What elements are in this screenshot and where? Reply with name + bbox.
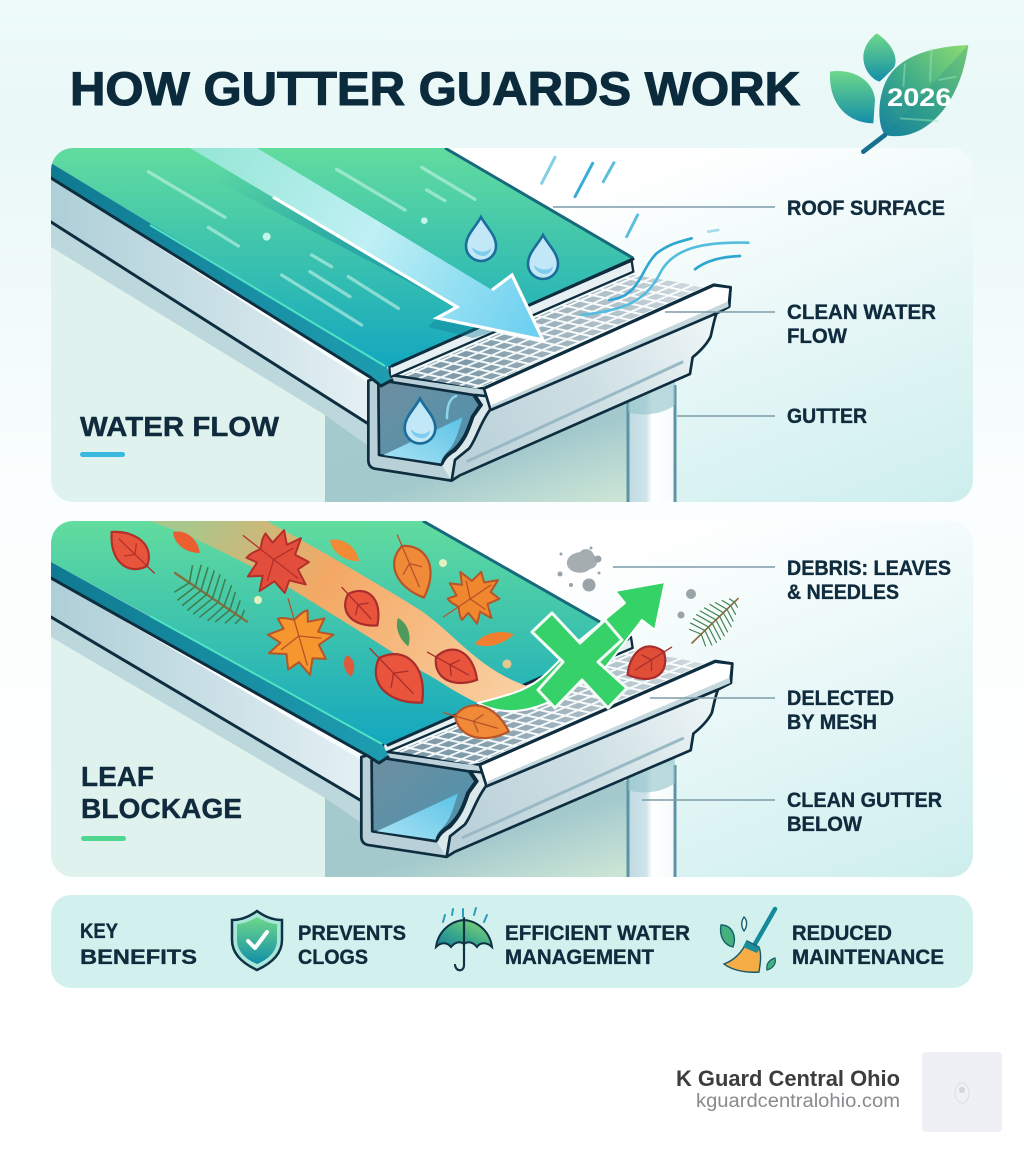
heading: key benefits: KEY (80, 920, 118, 943)
benefit: prevents clogs (298, 922, 406, 969)
wall shadow under gutter (325, 400, 640, 502)
benefit: efficient water management: EFFICIENT WATER (505, 922, 690, 945)
icon: broom and leaves (721, 909, 775, 972)
label: delected by mesh (787, 687, 894, 734)
water drops on roof (466, 217, 558, 279)
label: debris (787, 557, 951, 604)
footer brand text: K Guard Central Ohio (676, 1066, 900, 1091)
wall shadow under gutter (325, 780, 640, 877)
leader lines (613, 567, 775, 800)
benefit: prevents clogs: PREVENTS (298, 922, 406, 945)
leaf: red right (426, 648, 478, 684)
icon: 2026 leaf badge (830, 33, 968, 152)
leaf: orange (393, 534, 432, 599)
leaf: small orange 2 (475, 632, 514, 646)
label: clean gutter below (787, 789, 942, 836)
panel heading: leaf blockage: BLOCKAGE (81, 793, 242, 824)
pine sprig (174, 564, 248, 624)
benefit: reduced maintenance: REDUCED (792, 922, 892, 945)
footer brand text: kguardcentralohio.com (696, 1091, 900, 1112)
roof surface (51, 148, 633, 367)
leaf: small red (342, 654, 356, 677)
leaf: orange on mesh (439, 697, 513, 746)
water drop in gutter (405, 399, 435, 443)
label: clean water flow: FLOW (787, 325, 847, 348)
leaf: red (110, 530, 156, 574)
label: gutter: GUTTER (787, 405, 867, 428)
rain streaks (542, 157, 638, 237)
panel heading: leaf blockage: LEAF (81, 761, 154, 792)
gutter with mesh guard (361, 637, 732, 857)
leaf: orange maple small (442, 570, 500, 625)
soffit band (51, 578, 365, 802)
roof surface (51, 521, 628, 745)
panel: key benefits (51, 895, 973, 988)
benefit: prevents clogs: CLOGS (298, 946, 368, 969)
house wall left (51, 247, 325, 502)
icon: shield (232, 911, 282, 970)
wind and water curves (582, 230, 748, 315)
green X mark (532, 613, 627, 708)
leader lines (553, 207, 775, 416)
leaf: small orange red (173, 532, 200, 553)
leaf: small green (396, 618, 410, 646)
leaf: red on mesh (620, 634, 681, 689)
panel heading: water flow: WATER FLOW (80, 411, 280, 442)
icon: 2026 leaf badge: 2026 (887, 84, 951, 112)
heading: key benefits (80, 920, 197, 969)
icon: umbrella (436, 908, 492, 970)
deflected orange swoosh (150, 521, 527, 712)
label: delected by mesh: DELECTED (787, 687, 894, 710)
leaf: orange maple large (266, 598, 334, 676)
panel: water flow (51, 148, 973, 510)
gutter with mesh guard (368, 261, 731, 481)
heading underline (81, 836, 126, 841)
roof fascia (51, 163, 391, 387)
water flow arrow (190, 148, 543, 340)
benefit: efficient water management (505, 922, 690, 969)
label: clean water flow: CLEAN WATER (787, 301, 936, 324)
label: debris: DEBRIS: LEAVES (787, 557, 951, 580)
panel: leaf blockage (51, 509, 973, 885)
label: roof surface: ROOF SURFACE (787, 197, 945, 220)
benefit: reduced maintenance (792, 922, 944, 969)
downpipe (628, 758, 676, 885)
debris dust cloud (558, 546, 696, 618)
debris dots on roof (254, 559, 512, 668)
benefit: reduced maintenance: MAINTENANCE (792, 946, 944, 969)
panel heading: leaf blockage (81, 761, 242, 824)
heading: key benefits: BENEFITS (80, 946, 197, 969)
label: clean gutter below: CLEAN GUTTER (787, 789, 942, 812)
footer brand text (676, 1066, 900, 1112)
leaf: small orange (330, 540, 360, 562)
roof streaks (148, 167, 475, 325)
soffit band (51, 178, 372, 425)
roof fascia (51, 562, 388, 763)
house wall left (51, 637, 325, 877)
pine sprig right (680, 586, 750, 655)
title: HOW GUTTER GUARDS WORK (70, 62, 800, 115)
heading underline (80, 452, 125, 457)
downpipe (628, 380, 676, 510)
leaf: red lower (369, 648, 424, 704)
water splash in gutter (447, 396, 456, 418)
green deflection arrow (478, 582, 665, 711)
footer logo tile (922, 1052, 1002, 1132)
label: delected by mesh: BY MESH (787, 711, 877, 734)
label: debris: & NEEDLES (787, 581, 899, 604)
benefit: efficient water management: MANAGEMENT (505, 946, 654, 969)
label: clean gutter below: BELOW (787, 813, 862, 836)
leaf: red center (341, 586, 380, 627)
label: clean water flow (787, 301, 936, 348)
leaf: red maple (242, 529, 310, 594)
